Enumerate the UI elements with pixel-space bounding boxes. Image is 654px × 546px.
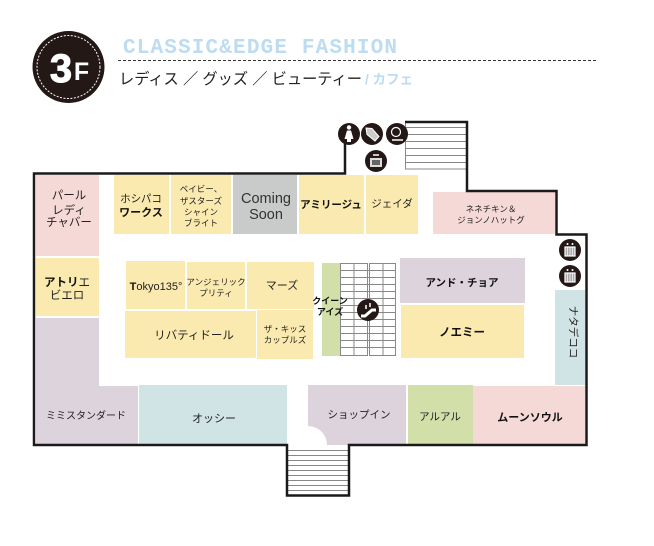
shop: ムーンソウル bbox=[473, 386, 585, 445]
shop: パールレディチャバー: チャバー bbox=[46, 216, 92, 229]
shop: アンジェリックプリティ: アンジェリック bbox=[186, 277, 246, 287]
shop: ミミスタンダード: ミミスタンダード bbox=[46, 409, 126, 422]
shop: ノエミー: ノエミー bbox=[439, 327, 485, 339]
shop: ショップイン bbox=[308, 385, 406, 445]
title: CLASSIC&EDGE FASHION: CLASSIC&EDGE FASHION bbox=[123, 37, 397, 60]
shop: リバティドール: リバティドール bbox=[154, 329, 234, 342]
icon: tag bbox=[361, 123, 383, 145]
escalators bbox=[340, 263, 396, 356]
shop: ネネチキン＆ジョンノハットグ: ジョンノハットグ bbox=[457, 215, 525, 225]
icon: elevator lower bbox=[559, 265, 581, 287]
icon: baby room bbox=[386, 123, 408, 145]
floor badge: 3F: 3 bbox=[50, 47, 72, 91]
shop: オッシー bbox=[139, 385, 287, 444]
shop: ムーンソウル: ムーンソウル bbox=[497, 411, 563, 424]
shop: アトリエビエロ: アトリエ bbox=[44, 276, 90, 289]
shop: Tokyo135°: Tokyo135° bbox=[130, 281, 182, 293]
icon: elevator upper bbox=[559, 239, 581, 261]
shop: アンド・チョア bbox=[400, 258, 525, 303]
shop: パールレディチャバー: パール bbox=[52, 189, 86, 202]
shop: ベイビーザスターズシャインブライト: ブライト bbox=[184, 218, 218, 228]
shop: アルアル bbox=[408, 385, 473, 445]
shop: ナタデココ: ナタデココ bbox=[567, 306, 580, 358]
building outline bbox=[34, 122, 586, 496]
shop: ベイビーザスターズシャインブライト: シャイン bbox=[184, 207, 218, 217]
icon: locker bbox=[365, 150, 387, 172]
lower stairs bbox=[288, 450, 349, 490]
shop: ジェイダ: ジェイダ bbox=[371, 197, 413, 210]
shop: ネネチキン＆ジョンノハットグ: ネネチキン＆ bbox=[466, 204, 516, 214]
shop: アミリージュ bbox=[299, 175, 364, 234]
shop: クイーンアイズ background bbox=[322, 263, 340, 356]
shop: ナタデココ bbox=[555, 290, 585, 385]
shop: ホシパコワークス: ワークス bbox=[119, 206, 163, 219]
shop: ザ・キッスカップルズ: カップルズ bbox=[264, 335, 307, 345]
subtitle: categories: レディス ／ グッズ ／ ビューティー bbox=[119, 69, 362, 88]
shop: アルアル: アルアル bbox=[419, 411, 461, 423]
subtitle: categories: / カフェ bbox=[365, 72, 413, 87]
shop: ベイビーザスターズシャインブライト: ベイビー、 bbox=[180, 184, 222, 194]
shop: アミリージュ: アミリージュ bbox=[300, 199, 362, 211]
label: クイーンアイズ: クイーン bbox=[312, 296, 348, 306]
shop: Coming Soon: Soon bbox=[249, 207, 283, 223]
shop: ノエミー bbox=[401, 305, 524, 358]
shop: ホシパコワークス bbox=[114, 175, 169, 234]
icon: escalator bbox=[357, 299, 379, 321]
shop: ミミスタンダード bbox=[36, 318, 138, 444]
shop: アンジェリックプリティ bbox=[186, 262, 246, 309]
shop: ネネチキン＆ジョンノハットグ bbox=[433, 192, 555, 234]
shop: アンド・チョア: アンド・チョア bbox=[425, 277, 499, 289]
label: クイーンアイズ: アイズ bbox=[317, 306, 343, 317]
upper stairs bbox=[405, 122, 466, 169]
floor plan shops bbox=[36, 175, 585, 445]
floor badge: 3F: F bbox=[74, 58, 89, 86]
label: クイーンアイズ bbox=[312, 296, 348, 317]
shop: アトリエビエロ: ビエロ bbox=[50, 289, 84, 302]
shop: Tokyo135° bbox=[126, 261, 185, 309]
shop: マーズ bbox=[247, 262, 314, 309]
floor badge: 3F bbox=[32, 31, 104, 103]
shop: Coming Soon bbox=[233, 175, 297, 234]
shop: ホシパコワークス: ホシパコ bbox=[120, 193, 162, 205]
shop: Coming Soon: Coming bbox=[241, 191, 291, 207]
shop: ザ・キッスカップルズ bbox=[257, 310, 313, 359]
icon: restroom bbox=[338, 123, 360, 145]
shop: ジェイダ bbox=[366, 175, 418, 234]
shop: パールレディチャバー bbox=[36, 175, 99, 256]
shop: リバティドール bbox=[125, 311, 256, 358]
shop: パールレディチャバー: レディ bbox=[52, 203, 86, 217]
shop: ザ・キッスカップルズ: ザ・キッス bbox=[264, 324, 306, 334]
shop: マーズ: マーズ bbox=[266, 278, 298, 292]
shop: アトリエビエロ bbox=[36, 258, 99, 316]
shop: ショップイン: ショップイン bbox=[328, 409, 390, 421]
shop: ベイビーザスターズシャインブライト: ザスターズ bbox=[180, 196, 222, 206]
shop: オッシー: オッシー bbox=[192, 412, 236, 425]
shop: アンジェリックプリティ: プリティ bbox=[199, 288, 233, 298]
shop: ベイビーザスターズシャインブライト bbox=[171, 175, 231, 234]
